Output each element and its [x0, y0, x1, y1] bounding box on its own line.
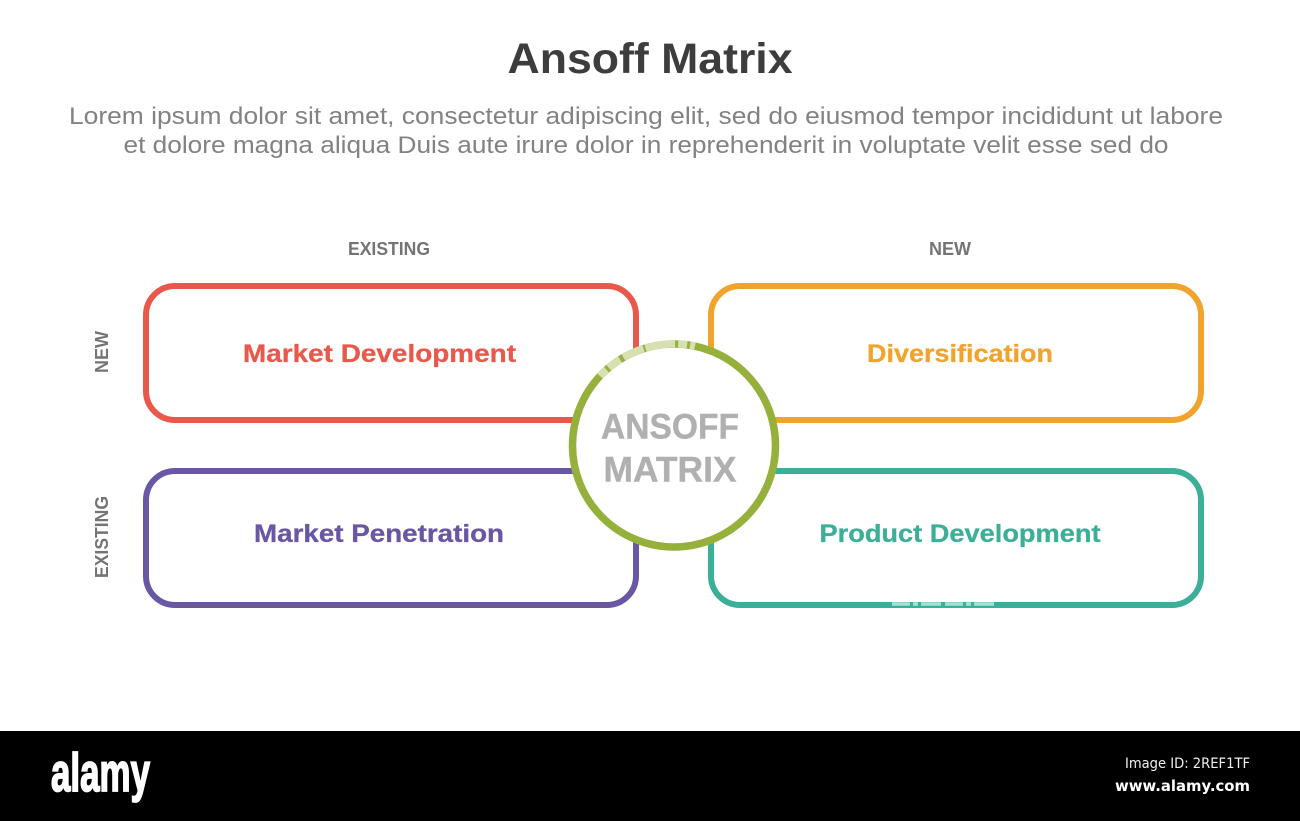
label: market penetration: Market Penetration [254, 520, 504, 548]
label: market development: Market Development [243, 340, 517, 368]
subtitle text block [69, 103, 1223, 159]
center label [601, 408, 739, 490]
subtitle text block: Lorem ipsum dolor sit amet, consectetur adipiscing elit, sed do eiusmod tempor incididunt ut labore [69, 103, 1223, 130]
center circle [572, 344, 776, 547]
panel: market development [146, 286, 636, 420]
site url: www.alamy.com [1115, 777, 1250, 795]
watermark-faded segment on teal border [892, 602, 998, 606]
label: diversification: Diversification [867, 340, 1053, 368]
panel: diversification [711, 286, 1201, 420]
column label: new: NEW [929, 239, 971, 259]
panel: product development [711, 471, 1201, 605]
label: product development: Product Development [820, 520, 1101, 548]
footer logo: alamy [51, 743, 150, 803]
subtitle text block: et dolore magna aliqua Duis aute irure dolor in reprehenderit in voluptate velit esse sed do [124, 132, 1168, 159]
row label: existing: EXISTING [92, 496, 112, 578]
image id: Image ID: 2REF1TF [1125, 756, 1250, 772]
title: Ansoff Matrix [508, 35, 793, 83]
footer bar [0, 731, 1300, 821]
column label: existing: EXISTING [348, 239, 430, 259]
row label: new: NEW [92, 331, 112, 373]
center label: ANSOFF [601, 408, 739, 446]
panel: market penetration [146, 471, 636, 605]
watermark-faded arc on circle [600, 344, 695, 376]
center label: MATRIX [604, 450, 737, 490]
